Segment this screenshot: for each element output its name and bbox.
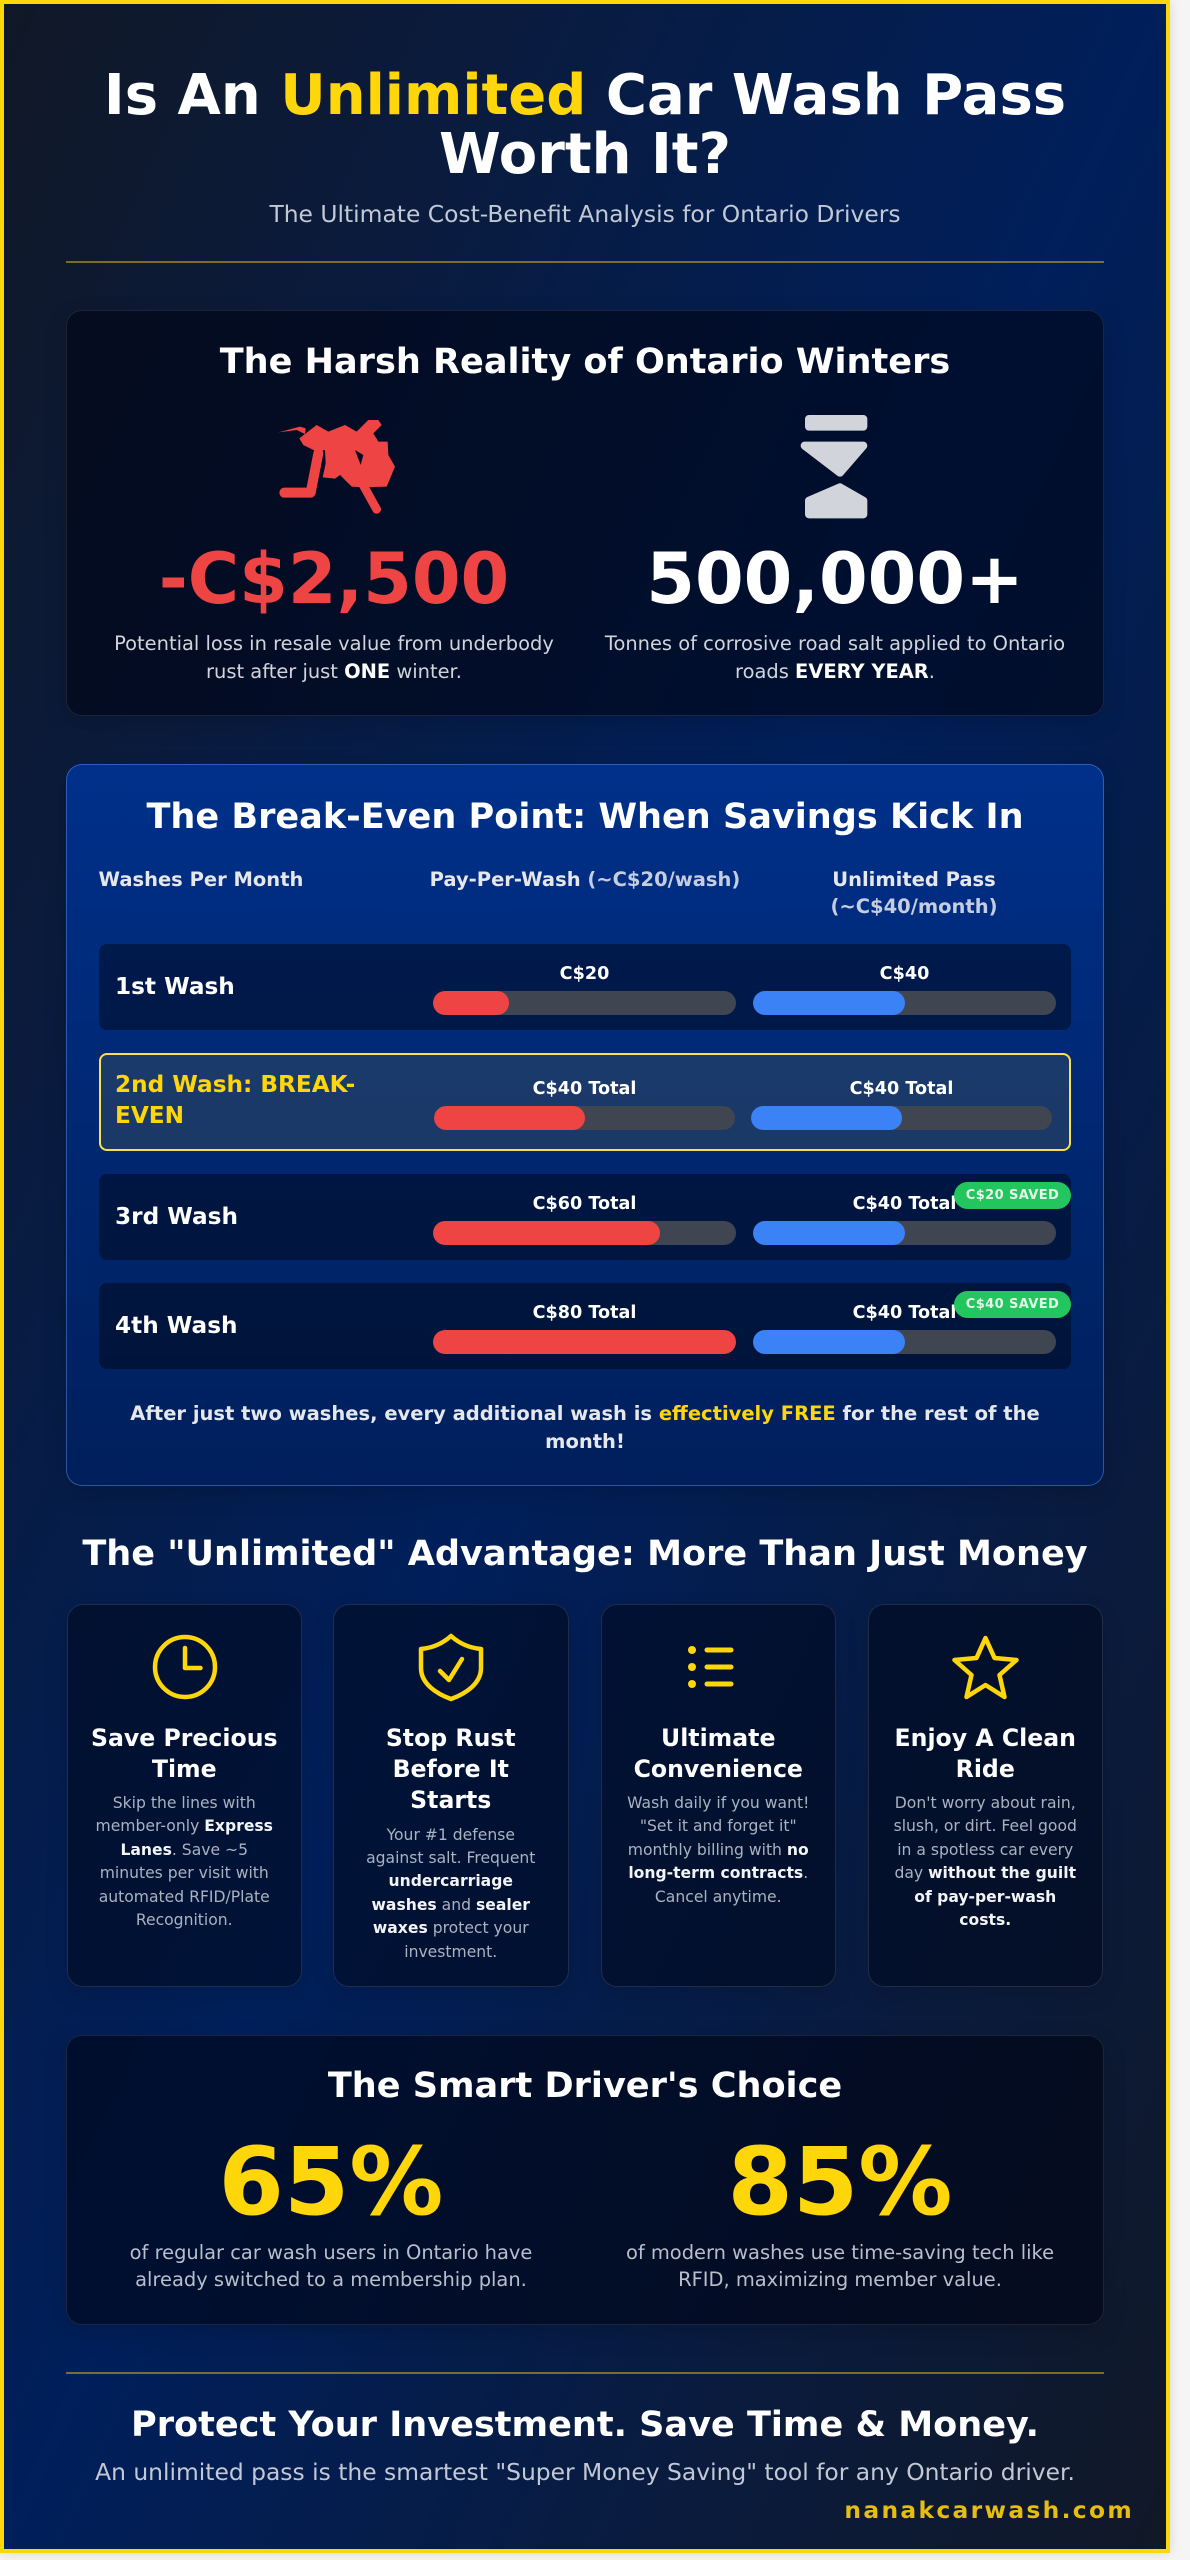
card text: minutes per visit with [100, 1864, 269, 1882]
column header: unlimited pass [830, 868, 998, 918]
icon: shield check [418, 1634, 484, 1702]
card text: monthly billing with no [628, 1841, 809, 1859]
card: clean ride [868, 1604, 1103, 1987]
text: resale description: Potential loss in resale value from underbody [114, 632, 554, 655]
card text [96, 1794, 273, 1929]
card title: Before It [393, 1754, 509, 1782]
card title [386, 1724, 516, 1814]
text: RFID description: RFID, maximizing member value. [678, 2268, 1002, 2291]
unlimited value: C$40 [880, 964, 929, 984]
card title: Convenience [634, 1754, 803, 1782]
card text: Recognition. [136, 1911, 233, 1929]
callout: every additional wash free [130, 1402, 1040, 1453]
unlimited value: C$40 Total [853, 1303, 956, 1323]
heading: break-even: The Break-Even Point: When Savings Kick In [146, 796, 1024, 836]
card text [366, 1826, 535, 1961]
card text: waxes protect your [373, 1919, 529, 1937]
icon: rust damage [278, 420, 395, 514]
card text: Lanes. Save ~5 [120, 1841, 248, 1859]
card text: investment. [404, 1943, 497, 1961]
card text: long-term contracts. [628, 1864, 808, 1882]
card title: Ultimate [661, 1724, 775, 1752]
card text: Don't worry about rain, [895, 1794, 1076, 1812]
card title: Ride [956, 1754, 1015, 1782]
panel: break-even point [66, 764, 1104, 1486]
website: nanakcarwash.com [844, 2496, 1134, 2524]
card text: slush, or dirt. Feel good [894, 1817, 1077, 1835]
text: resale description: rust after just ONE winter. [206, 660, 462, 683]
label: EVEN [115, 1102, 184, 1129]
card text: of pay-per-wash [914, 1888, 1056, 1906]
icon: list [688, 1646, 734, 1688]
label: 1st Wash [115, 973, 235, 1000]
card title: Save Precious [91, 1724, 278, 1752]
stat: resale loss: -C$2,500 [159, 538, 509, 620]
unlimited bar [753, 1330, 1056, 1354]
unlimited bar [753, 991, 1056, 1015]
card title: Stop Rust [386, 1724, 516, 1752]
footer text: An unlimited pass is the smartest "Super Money Saving" tool for any Ontario driver. [95, 2458, 1075, 2486]
card title: Starts [410, 1786, 491, 1814]
card text: Cancel anytime. [655, 1888, 782, 1906]
card text: washes and sealer [372, 1896, 530, 1914]
label: 3rd Wash [115, 1203, 238, 1230]
card: save time [66, 1604, 302, 1987]
label: 2nd Wash: BREAK- [115, 1071, 355, 1098]
badge: C$40 saved [954, 1291, 1071, 1318]
pay-per-wash value: C$60 Total [533, 1194, 636, 1214]
card title [91, 1724, 278, 1782]
pay-per-wash bar [433, 991, 736, 1015]
callout: every additional wash free: month! [545, 1430, 625, 1453]
stat: 85 percent: 85% [728, 2128, 952, 2237]
card text: against salt. Frequent [366, 1849, 535, 1867]
card text: member-only Express [96, 1817, 273, 1835]
card text: "Set it and forget it" [640, 1817, 797, 1835]
text: RFID description: of modern washes use time-saving tech like [626, 2241, 1054, 2264]
card text: in a spotless car every [897, 1841, 1073, 1859]
card title: Enjoy A Clean [895, 1724, 1076, 1752]
text: salt description: Tonnes of corrosive road salt applied to Ontario [605, 632, 1065, 655]
panel: harsh reality of Ontario winters [66, 310, 1104, 716]
text: salt description: roads EVERY YEAR. [735, 660, 935, 683]
card text: costs. [959, 1911, 1011, 1929]
row: 3rd wash [99, 1174, 1071, 1260]
unlimited bar [753, 1221, 1056, 1245]
pay-per-wash bar [433, 1330, 736, 1354]
unlimited value: C$40 Total [850, 1079, 953, 1099]
text: membership description: already switched to a membership plan. [135, 2268, 527, 2291]
title: Is An Unlimited Car Wash Pass [104, 63, 1066, 128]
icon: star [952, 1636, 1019, 1700]
badge: C$20 saved: C$20 SAVED [966, 1188, 1059, 1203]
unlimited bar [751, 1106, 1052, 1130]
pay-per-wash value: C$40 Total [533, 1079, 636, 1099]
heading: smart driver's choice: The Smart Driver's Choice [328, 2065, 842, 2106]
card text: automated RFID/Plate [99, 1888, 270, 1906]
pay-per-wash value: C$20 [560, 964, 609, 984]
card text: day without the guilt [894, 1864, 1076, 1882]
subtitle: The Ultimate Cost-Benefit Analysis for Ontario Drivers [269, 200, 901, 228]
title: Worth It? [439, 122, 731, 187]
card text: Your #1 defense [387, 1826, 515, 1844]
stat: 65 percent: 65% [218, 2128, 444, 2237]
text: resale description [114, 632, 554, 683]
badge: C$40 saved: C$40 SAVED [966, 1297, 1059, 1312]
icon: hourglass salt [800, 415, 868, 518]
card: convenience [600, 1604, 836, 1987]
badge: C$20 saved [954, 1182, 1071, 1209]
unlimited value: C$40 Total [853, 1194, 956, 1214]
card text: undercarriage [389, 1872, 513, 1890]
text: membership description [130, 2241, 532, 2291]
column header: pay-per-wash: Pay-Per-Wash (~C$20/wash) [430, 868, 740, 891]
row: 2nd wash break-even [99, 1053, 1071, 1151]
text: membership description: of regular car wash users in Ontario have [130, 2241, 532, 2264]
text: RFID description [626, 2241, 1054, 2291]
card title [634, 1724, 803, 1782]
card title: Time [152, 1754, 217, 1782]
callout: every additional wash free: After just two washes, every additional wash is effectively FREE for the rest of the [130, 1402, 1040, 1425]
card text: Skip the lines with [113, 1794, 256, 1812]
icon: clock [152, 1634, 218, 1700]
column header: unlimited pass: (~C$40/month) [830, 895, 998, 918]
label [115, 1071, 355, 1129]
heading: unlimited advantage: The "Unlimited" Advantage: More Than Just Money [82, 1532, 1088, 1574]
row: 1st wash [99, 944, 1071, 1030]
heading: harsh reality: The Harsh Reality of Ontario Winters [220, 340, 950, 382]
panel: smart driver's choice [66, 2035, 1104, 2325]
card text [894, 1794, 1077, 1929]
footer heading: Protect Your Investment. Save Time & Money. [131, 2404, 1039, 2445]
column header: washes per month: Washes Per Month [98, 868, 303, 891]
title [104, 63, 1066, 187]
text: salt description [604, 632, 1065, 683]
pay-per-wash value: C$80 Total [533, 1303, 636, 1323]
stat: road salt: 500,000+ [646, 538, 1024, 620]
card: stop rust [333, 1604, 568, 1987]
card text: Wash daily if you want! [627, 1794, 809, 1812]
column header: unlimited pass: Unlimited Pass [832, 868, 996, 891]
card text [627, 1794, 809, 1906]
pay-per-wash bar [434, 1106, 735, 1130]
label: 4th Wash [115, 1312, 238, 1339]
card title [895, 1724, 1076, 1782]
pay-per-wash bar [433, 1221, 736, 1245]
row: 4th wash [99, 1283, 1071, 1369]
